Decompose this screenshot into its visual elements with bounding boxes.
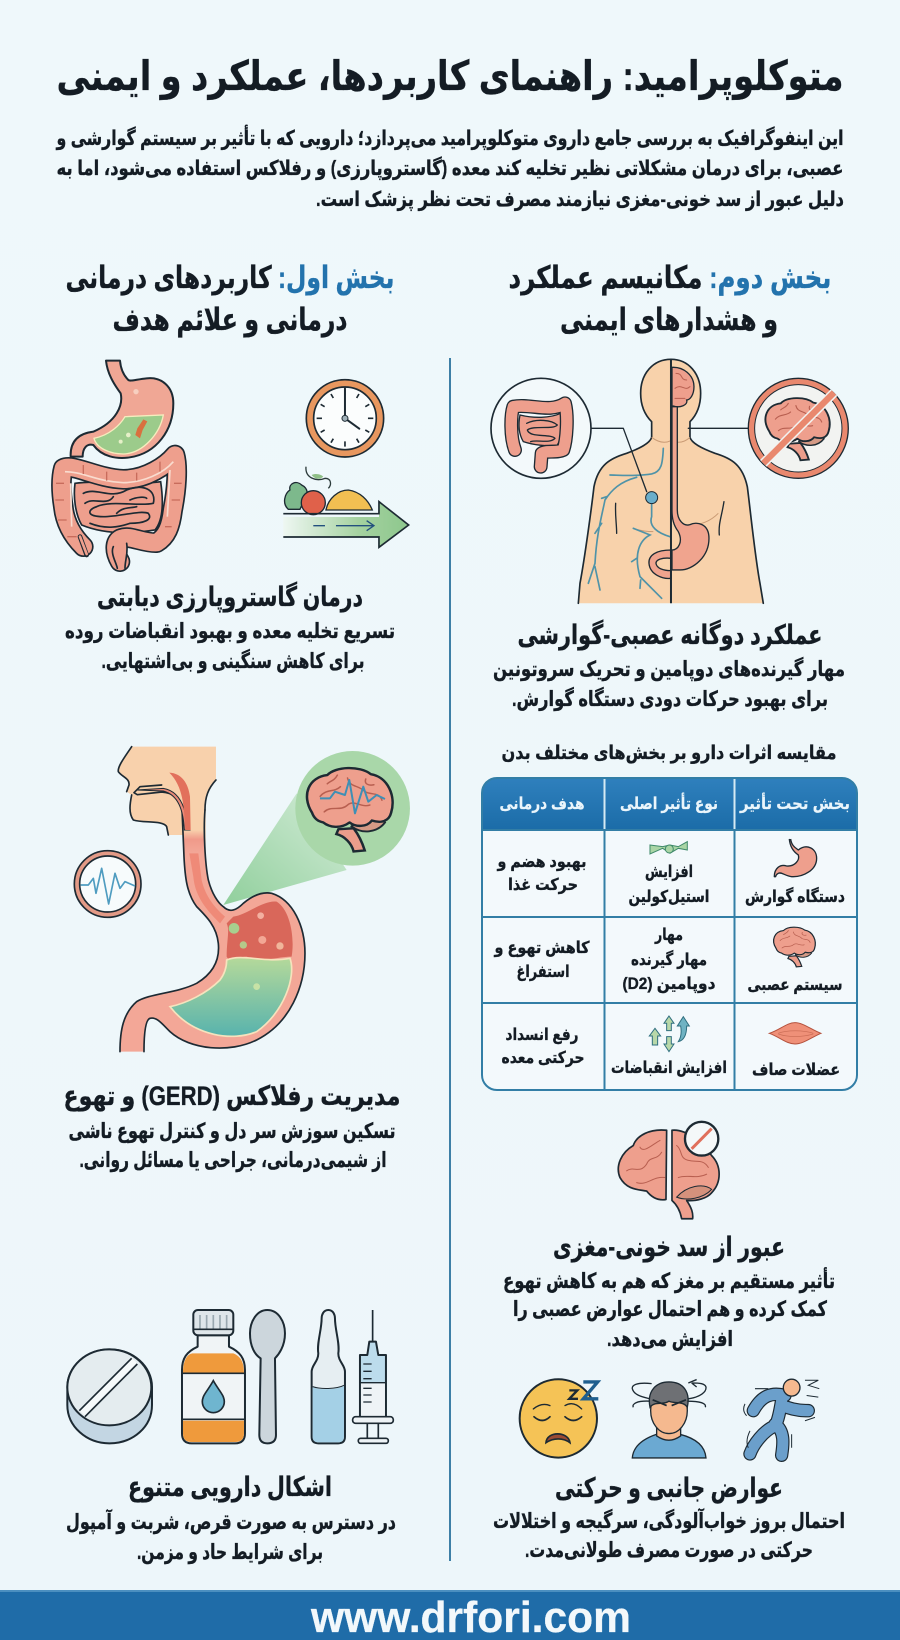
description: dosage forms bbox=[66, 1509, 396, 1564]
description: gastroparesis: تسریع تخلیه معده و بهبود انقباضات روده bbox=[65, 620, 395, 643]
description: dosage forms: در دسترس به صورت قرص، شربت و آمپول bbox=[66, 1509, 396, 1534]
table row: nervous: سیستم عصبی bbox=[748, 976, 842, 994]
heading: GERD: مدیریت رفلاکس (GERD) و تهوع bbox=[63, 1081, 400, 1112]
heading: dosage forms: اشکال دارویی متنوع bbox=[128, 1472, 332, 1503]
table row: smooth muscle: رفع انسداد bbox=[506, 1026, 578, 1045]
icon: stomach and intestines bbox=[55, 361, 182, 568]
table row: nervous: مهار گیرنده bbox=[631, 949, 707, 970]
table header row bbox=[500, 793, 850, 814]
description: GERD: تسکین سوزش سر دل و کنترل تهوع ناشی bbox=[68, 1120, 396, 1143]
heading: section one bbox=[66, 260, 394, 338]
icon: tablet, syrup, spoon, ampoule and syringe bbox=[67, 1310, 393, 1443]
heading: section one: بخش اول: کاربردهای درمانی bbox=[66, 260, 394, 296]
description: GERD bbox=[68, 1120, 396, 1172]
icon: sleepy face bbox=[520, 1379, 598, 1458]
heading: blood-brain barrier: عبور از سد خونی-مغزی bbox=[553, 1232, 785, 1263]
description: gastroparesis: برای کاهش سنگینی و بی‌اشتهایی. bbox=[102, 648, 364, 673]
icon: reflux stomach and brain bbox=[74, 747, 410, 1052]
table header row: بخش تحت تأثیر bbox=[739, 793, 850, 814]
table row: smooth muscle: حرکتی معده bbox=[502, 1049, 584, 1068]
panel: GERD and nausea bbox=[63, 747, 410, 1172]
table row: nervous bbox=[494, 926, 842, 994]
icon: split brain with barrier sign bbox=[618, 1122, 719, 1219]
table header row: نوع تأثیر اصلی bbox=[620, 793, 718, 814]
table row: digestive: دستگاه گوارش bbox=[745, 886, 845, 907]
panel: dosage forms bbox=[66, 1310, 396, 1564]
table row: digestive: حرکت غذا bbox=[508, 876, 578, 895]
description: dual action bbox=[493, 656, 845, 711]
panel: dual mechanism bbox=[491, 359, 848, 711]
table row: digestive: بهبود هضم و bbox=[497, 853, 586, 872]
description: gastroparesis bbox=[65, 620, 395, 673]
table row: nervous: مهار bbox=[654, 926, 683, 945]
table row: nervous: دوپامین (D2) bbox=[622, 975, 716, 994]
center divider bbox=[449, 358, 451, 1561]
table header row: هدف درمانی bbox=[500, 795, 584, 813]
description: side effects: حرکتی در صورت مصرف طولانی‌مدت. bbox=[525, 1539, 813, 1562]
table row: digestive bbox=[497, 839, 845, 907]
panel: blood-brain barrier bbox=[503, 1122, 835, 1351]
description: dosage forms: برای شرایط حاد و مزمن. bbox=[137, 1541, 323, 1564]
heading: diabetic gastroparesis: درمان گاستروپارزی دیابتی bbox=[97, 581, 363, 613]
heading: section two bbox=[508, 260, 832, 338]
description: side effects bbox=[493, 1508, 845, 1562]
table row: smooth muscle: عضلات صاف bbox=[752, 1061, 840, 1079]
table row: digestive: استیل‌کولین bbox=[628, 888, 710, 907]
footer band bbox=[0, 1590, 900, 1640]
icon: dizzy head bbox=[632, 1380, 706, 1458]
table row: smooth muscle bbox=[502, 1016, 840, 1079]
comparison table bbox=[482, 778, 857, 1090]
table row: smooth muscle: افزایش انقباضات bbox=[611, 1059, 727, 1078]
heading: section two: و هشدارهای ایمنی bbox=[560, 302, 778, 338]
panel: gastroparesis bbox=[55, 361, 409, 673]
table row: nervous: کاهش تهوع و bbox=[494, 939, 590, 958]
description: blood-brain barrier: افزایش می‌دهد. bbox=[607, 1328, 733, 1351]
description: blood-brain barrier bbox=[503, 1266, 835, 1351]
heading: section two: بخش دوم: مکانیسم عملکرد bbox=[508, 260, 832, 296]
icon: movement disorder figure bbox=[744, 1379, 819, 1455]
intro paragraph bbox=[56, 124, 844, 211]
heading: side effects: عوارض جانبی و حرکتی bbox=[555, 1473, 783, 1504]
icon: clock bbox=[306, 380, 384, 457]
panel: side effects bbox=[493, 1379, 845, 1562]
table caption: مقایسه اثرات دارو بر بخش‌های مختلف بدن bbox=[502, 743, 836, 764]
description: GERD: از شیمی‌درمانی، جراحی یا مسائل روانی. bbox=[80, 1149, 386, 1172]
table row: digestive: افزایش bbox=[645, 863, 693, 882]
table row: nervous: استفراغ bbox=[516, 963, 570, 982]
heading: section one: درمانی و علائم هدف bbox=[112, 302, 348, 338]
icon: human body with gut and brain callouts bbox=[491, 359, 848, 603]
icon: food moving along arrow bbox=[283, 467, 409, 547]
